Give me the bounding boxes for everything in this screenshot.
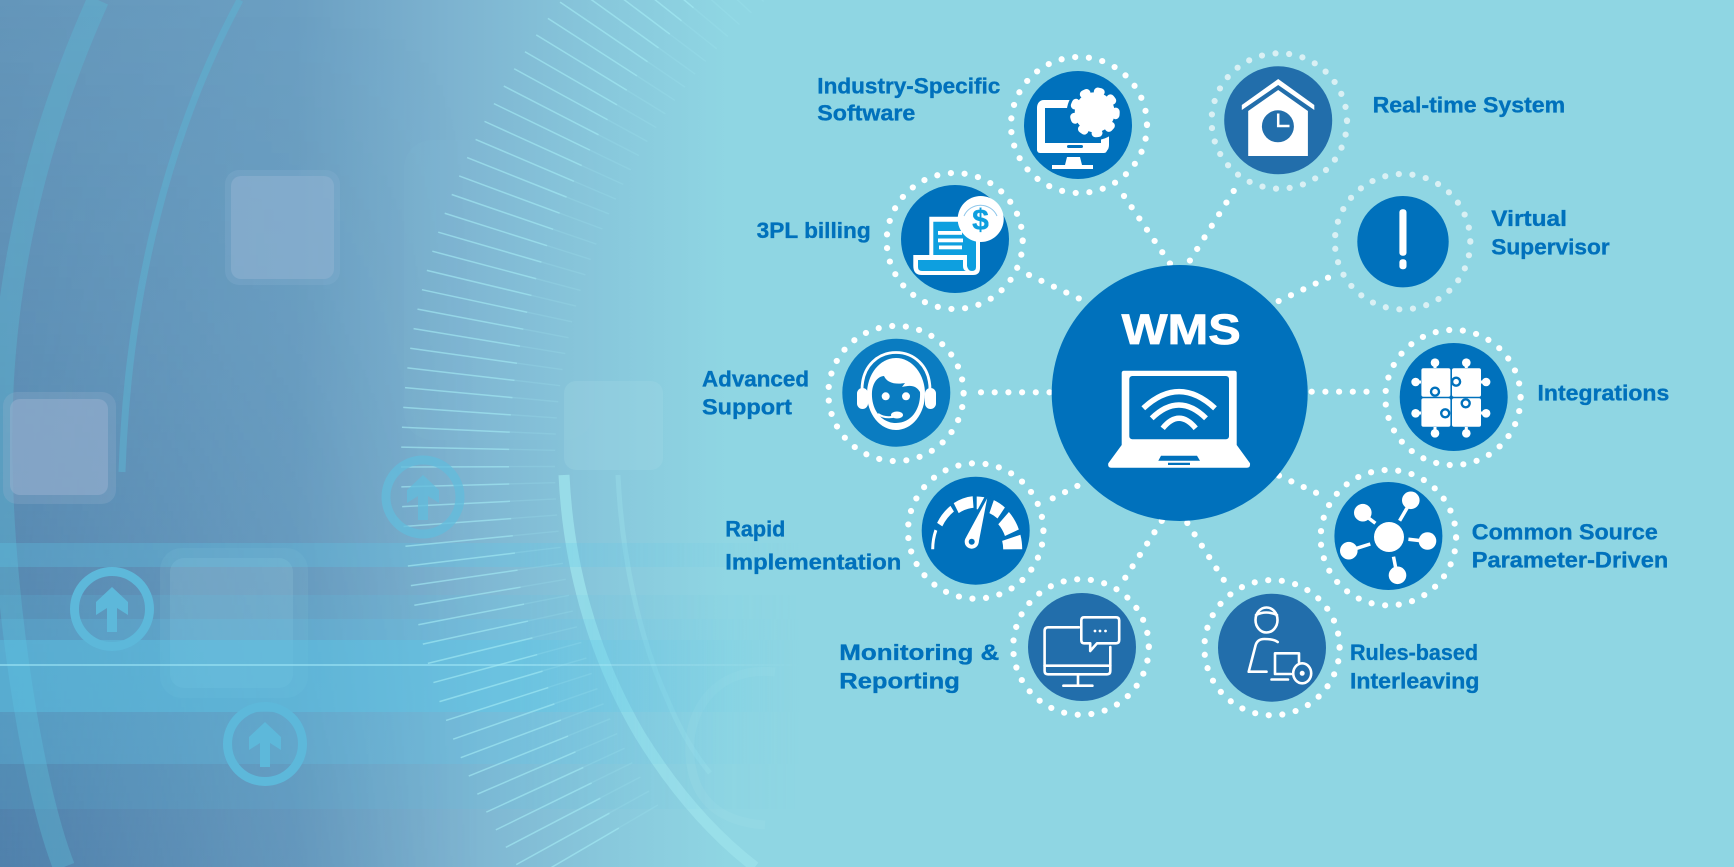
node: Industry-Specific Software bbox=[817, 57, 1147, 193]
icon: monitor with gear bbox=[1037, 84, 1123, 169]
node: Monitoring & Reporting bbox=[839, 579, 1149, 715]
label: Monitoring & bbox=[839, 640, 999, 665]
center hub: WMS bbox=[1052, 265, 1308, 521]
radial tick ring bbox=[455, 0, 748, 867]
connector dots bbox=[981, 191, 1367, 581]
label: Rules-based bbox=[1350, 640, 1478, 665]
arrow badge 3 bbox=[228, 706, 302, 782]
horizontal light bands bbox=[0, 543, 735, 764]
label: Rapid bbox=[725, 517, 785, 542]
node: Rules-based Interleaving: Interleaving bbox=[1350, 669, 1480, 694]
arrow badge 2 bbox=[74, 572, 150, 646]
background bbox=[0, 0, 758, 867]
icon: house with clock bbox=[1242, 79, 1314, 156]
icon: puzzle bbox=[1411, 358, 1490, 438]
light arc bands bbox=[1, 0, 775, 867]
node: Common Source Parameter-Driven: Parameter-Driven bbox=[1472, 547, 1668, 572]
node: Rapid Implementation: Implementation bbox=[725, 550, 901, 575]
label: Integrations bbox=[1538, 380, 1669, 405]
node: Advanced Support bbox=[702, 326, 964, 461]
label: 3PL billing bbox=[757, 218, 871, 243]
label: Virtual bbox=[1491, 206, 1567, 231]
node: Real-time System bbox=[1212, 53, 1565, 189]
icon: invoice with dollar bbox=[913, 196, 1004, 275]
node: Monitoring & Reporting: Reporting bbox=[839, 669, 960, 694]
node: Industry-Specific Software: Software bbox=[817, 101, 915, 126]
node: Rules-based Interleaving bbox=[1204, 580, 1480, 715]
label: Common Source bbox=[1472, 519, 1658, 544]
heading: WMS bbox=[1122, 306, 1241, 354]
node: Rapid Implementation bbox=[725, 463, 1043, 599]
node: Advanced Support: Support bbox=[702, 394, 793, 419]
icon: laptop with wifi bbox=[1108, 371, 1250, 468]
label: Real-time System bbox=[1373, 92, 1565, 117]
icon: monitor with chat bbox=[1045, 617, 1119, 686]
node: Virtual Supervisor bbox=[1335, 174, 1610, 309]
node: 3PL billing bbox=[757, 173, 1023, 309]
label: Advanced bbox=[702, 366, 809, 391]
arrow badge 1 bbox=[386, 460, 460, 534]
icon: invoice with dollar: $ bbox=[972, 204, 989, 237]
icon: headset agent bbox=[857, 352, 936, 430]
node: Integrations bbox=[1385, 330, 1669, 465]
rounded squares bbox=[3, 140, 663, 698]
icon: worker at terminal bbox=[1249, 608, 1311, 683]
node: Common Source Parameter-Driven bbox=[1321, 470, 1668, 605]
icon: exclamation bbox=[1399, 209, 1406, 269]
icon: hub network bbox=[1340, 492, 1436, 584]
label: Industry-Specific bbox=[817, 73, 1000, 98]
node: Virtual Supervisor: Supervisor bbox=[1491, 234, 1610, 259]
icon: speedometer bbox=[933, 489, 1013, 549]
